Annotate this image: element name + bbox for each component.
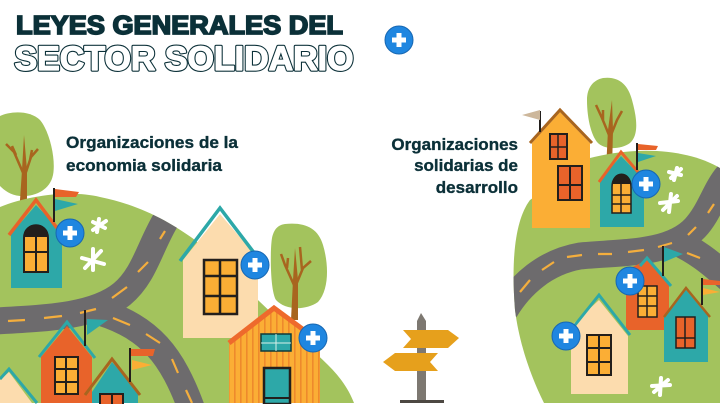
- house: bottom-left small teal: [85, 348, 155, 405]
- house: central cream: [180, 208, 258, 338]
- icon: plus button left house: [56, 219, 84, 247]
- icon: plus button right orange house: [616, 267, 644, 295]
- icon: signpost: [383, 313, 459, 403]
- title: LEYES GENERALES DEL: [16, 10, 343, 40]
- text block: right heading: Organizaciones: [391, 135, 518, 154]
- house: right teal lower: [664, 278, 720, 362]
- house: right cream: [571, 295, 630, 394]
- icon: plus button striped house: [299, 324, 327, 352]
- text block: left heading: [66, 133, 239, 175]
- icon: flowers: [82, 168, 681, 395]
- title: SECTOR SOLIDARIO: [14, 40, 354, 78]
- illustration: right hill: [505, 151, 720, 403]
- icon: plus button right cream house: [552, 322, 580, 350]
- icon: plus button cream house: [241, 251, 269, 279]
- road: right winding road: [505, 175, 720, 310]
- house: right teal with flags: [599, 143, 658, 227]
- illustration: left tree: [0, 112, 54, 200]
- title: [14, 10, 354, 78]
- text block: right heading: solidarias de: [414, 156, 518, 175]
- illustration: right tree: [587, 78, 636, 154]
- house: bottom-left cream corner: [0, 369, 37, 403]
- text block: right heading: desarrollo: [436, 178, 518, 197]
- illustration: central tree: [271, 224, 327, 320]
- icon: plus button right teal house: [632, 170, 660, 198]
- illustration: left hill: [0, 194, 354, 405]
- text block: right heading: [391, 135, 518, 197]
- text block: left heading: economia solidaria: [66, 156, 223, 175]
- title: SECTOR SOLIDARIO: [14, 40, 354, 78]
- icon: plus button title: [385, 26, 413, 54]
- house: left teal: [9, 188, 79, 288]
- house: bottom-left orange: [39, 310, 108, 403]
- house: right orange: [626, 246, 683, 330]
- house: central striped orange: [229, 308, 320, 404]
- text block: left heading: Organizaciones de la: [66, 133, 239, 152]
- road: left winding road: [0, 218, 192, 405]
- house: right yellow: [522, 110, 592, 228]
